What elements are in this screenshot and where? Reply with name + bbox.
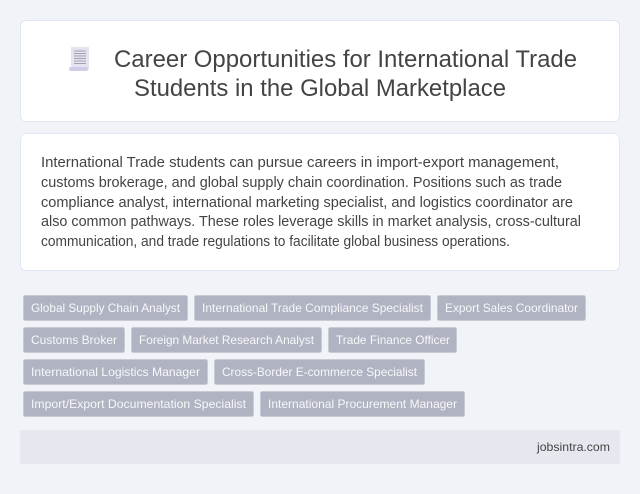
tag: Cross-Border E-commerce Specialist — [222, 365, 418, 379]
panel: header — [20, 20, 620, 122]
tag — [24, 360, 208, 384]
tag: International Trade Compliance Specialist — [202, 301, 424, 315]
tag: International Procurement Manager — [268, 397, 457, 411]
icon: document scroll — [69, 47, 89, 71]
summary text: International Trade students can pursue careers in import-export management, — [41, 155, 559, 171]
footer: jobsintra.com — [536, 440, 610, 454]
summary text: customs brokerage, and global supply chain coordination. Positions such as trade — [41, 175, 562, 191]
title: Career Opportunities for International Trade — [114, 46, 577, 73]
tag: Trade Finance Officer — [336, 333, 450, 347]
tag: Customs Broker — [31, 333, 117, 347]
tag: Foreign Market Research Analyst — [139, 333, 315, 347]
tag — [438, 296, 586, 320]
tag — [328, 328, 456, 352]
career tags — [24, 296, 586, 416]
tag — [24, 392, 254, 416]
summary text: compliance analyst, international marketing specialist, and logistics coordinator are — [41, 195, 573, 211]
tag — [260, 392, 464, 416]
footer — [20, 430, 620, 464]
summary text: communication, and trade regulations to facilitate global business operations. — [41, 234, 510, 250]
tag: Global Supply Chain Analyst — [31, 301, 181, 315]
summary text — [41, 155, 581, 250]
tag: Import/Export Documentation Specialist — [31, 397, 247, 411]
summary text: also common pathways. These roles leverage skills in market analysis, cross-cultural — [41, 214, 581, 230]
tag — [214, 360, 424, 384]
tag — [132, 328, 322, 352]
title — [114, 46, 577, 102]
tag — [24, 328, 124, 352]
panel: summary — [20, 134, 620, 270]
tag: Export Sales Coordinator — [445, 301, 578, 315]
title: Students in the Global Marketplace — [134, 75, 506, 102]
tag: International Logistics Manager — [31, 365, 200, 379]
tag — [194, 296, 430, 320]
tag — [24, 296, 188, 320]
